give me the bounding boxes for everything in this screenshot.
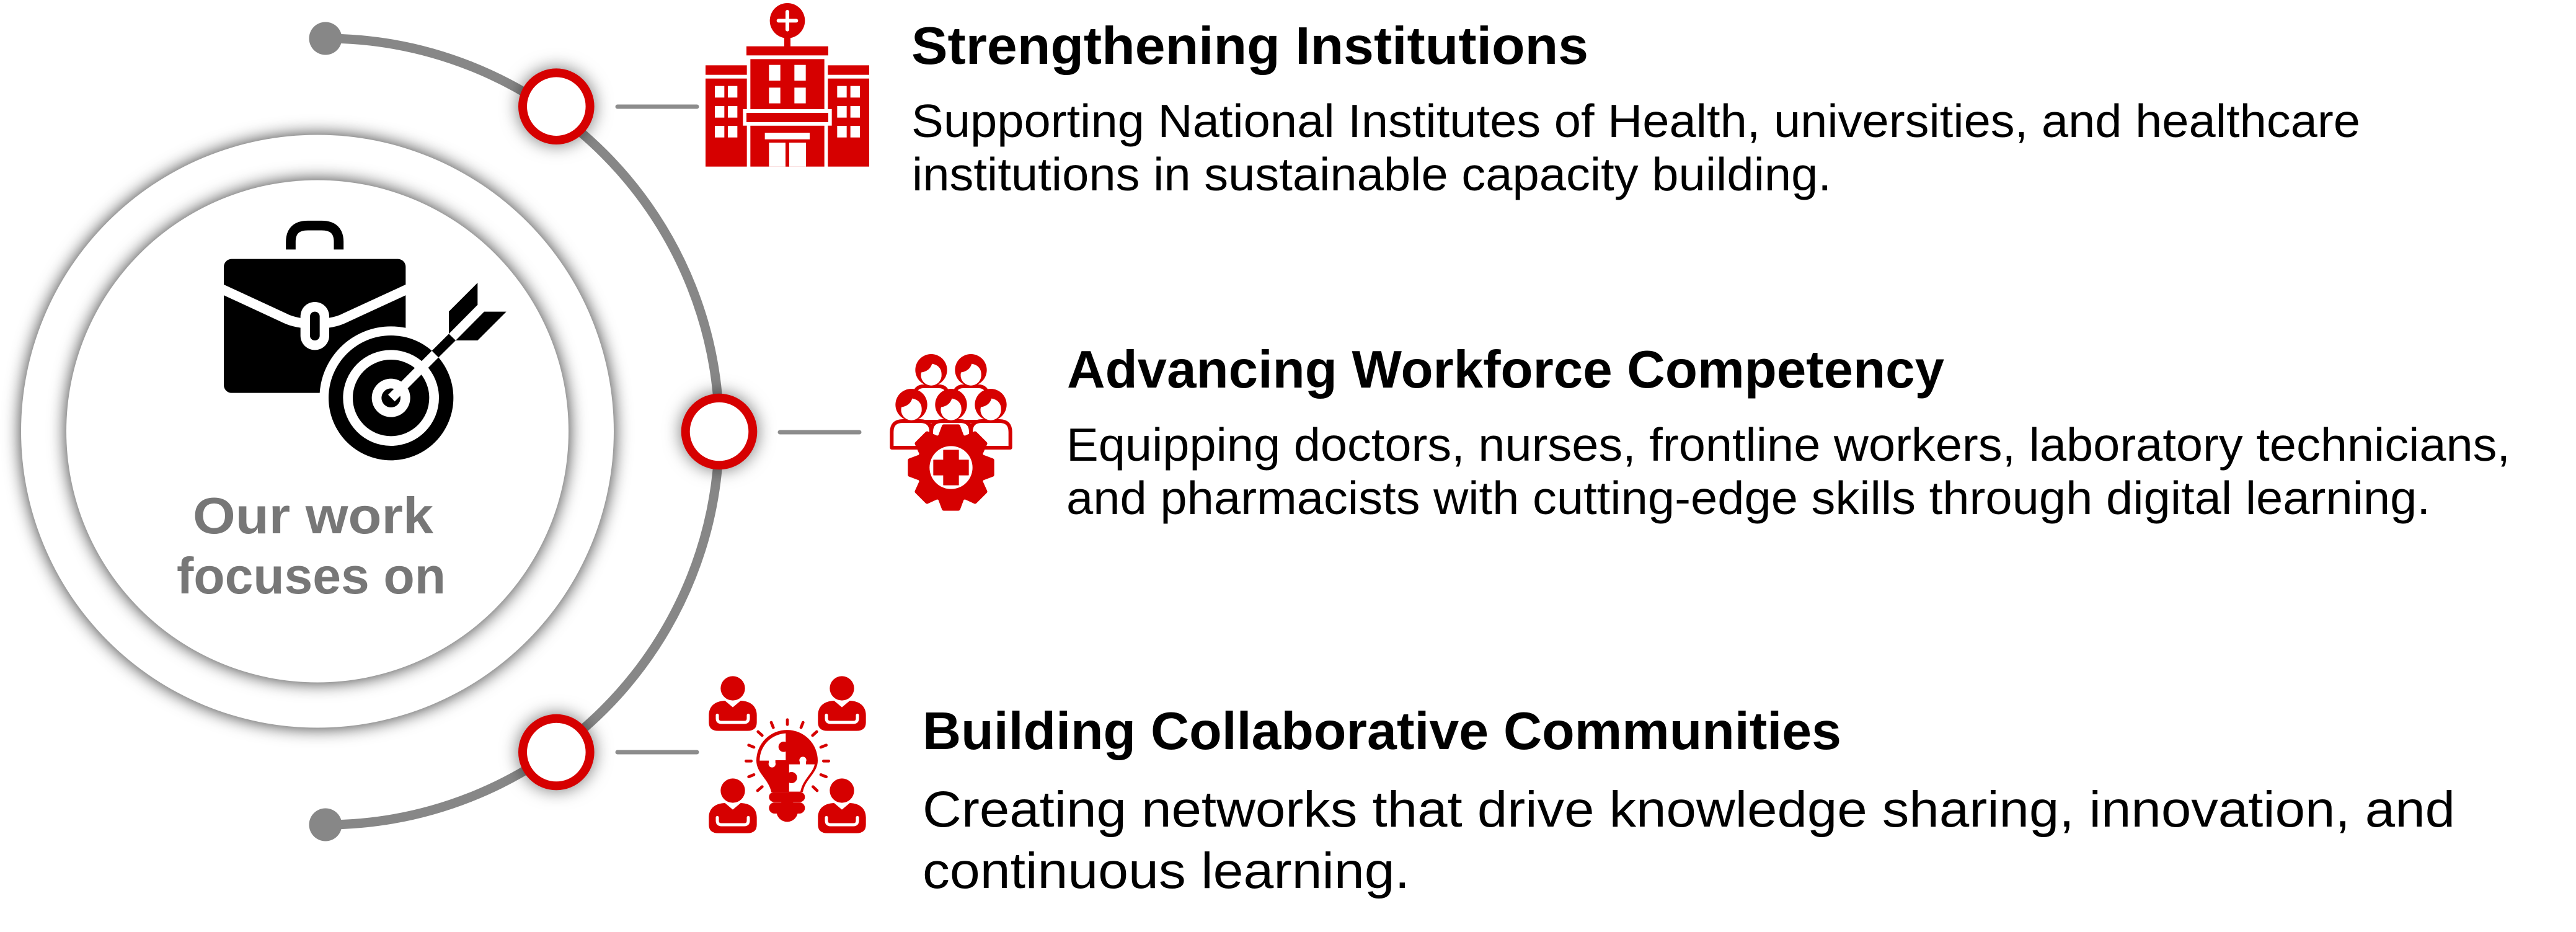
text block: building collaborative communities: continuous learning.	[923, 843, 1410, 899]
text block: strengthening institutions	[911, 17, 2360, 200]
text block: building collaborative communities: Creating networks that drive knowledge sharing, innovation, and	[923, 781, 2455, 838]
node: top ring	[523, 73, 590, 140]
connector: bottom	[617, 750, 697, 754]
node: bottom ring	[523, 719, 590, 786]
text block: advancing workforce competency: Advancing Workforce Competency	[1067, 340, 1944, 399]
central panel: concentric circles	[21, 135, 614, 728]
icon: community with puzzle light bulb	[709, 676, 866, 833]
node: middle ring	[686, 398, 753, 465]
text block: building collaborative communities	[923, 702, 2455, 899]
connector: middle	[780, 430, 859, 434]
icon: briefcase and target with dart	[219, 226, 507, 469]
heading: our work focuses on	[177, 487, 446, 605]
text block: strengthening institutions: Supporting National Institutes of Health, universities, and healthcare	[911, 95, 2360, 147]
text block: building collaborative communities: Building Collaborative Communities	[923, 702, 1841, 761]
heading: our work focuses on: Our work	[193, 487, 434, 544]
connector: top	[617, 104, 697, 109]
icon: hospital	[706, 3, 869, 167]
heading: our work focuses on: focuses on	[177, 547, 446, 605]
text block: advancing workforce competency: and pharmacists with cutting-edge skills through digital learning.	[1066, 472, 2430, 524]
grey timeline arc	[309, 22, 719, 841]
text block: advancing workforce competency: Equipping doctors, nurses, frontline workers, laboratory technicians,	[1066, 419, 2510, 471]
icon: medical team with gear	[892, 354, 1011, 511]
text block: strengthening institutions: Strengthening Institutions	[911, 17, 1588, 76]
text block: advancing workforce competency	[1066, 340, 2510, 524]
text block: strengthening institutions: institutions in sustainable capacity building.	[912, 148, 1831, 200]
